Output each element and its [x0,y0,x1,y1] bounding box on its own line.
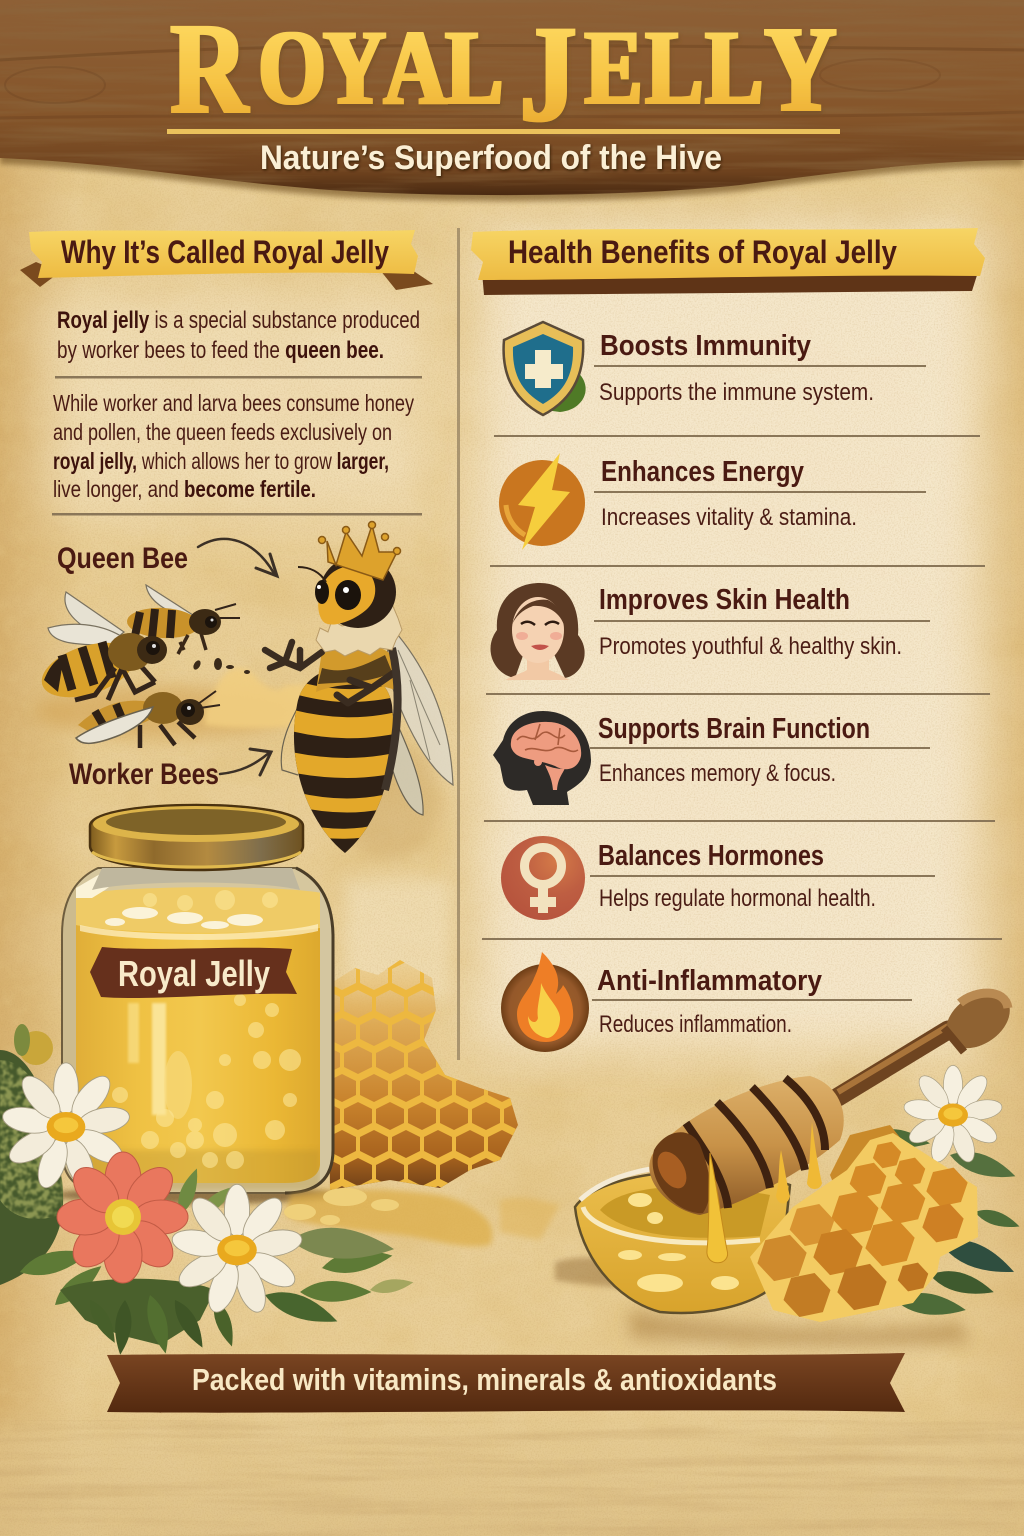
title: R [171,0,249,140]
honey dipper [649,980,1020,1263]
divider [490,565,985,567]
rule [52,513,422,516]
daisy right [170,1184,304,1316]
explanation text: royal jelly, which allows her to grow larger, [53,448,389,474]
ribbon: why it's called royal jelly [20,230,433,290]
queen head [298,556,396,628]
title rule [167,129,840,134]
benefit 4: supports brain function [493,711,930,805]
title: Y [764,3,836,137]
explanation text [53,390,414,502]
benefit 3: improves skin health: Improves Skin Health [599,584,850,616]
title: OYAL [258,9,527,126]
icon: flame [501,952,589,1052]
benefit 6: anti-inflammatory: Reduces inflammation. [599,1011,792,1038]
benefit 4: supports brain function: Enhances memory & focus. [599,760,836,787]
icon: brain head [493,711,591,805]
arrow from workers [220,749,271,775]
benefit 5: balances hormones: Balances Hormones [598,840,824,872]
queen thorax and arms [265,642,398,790]
explanation text: live longer, and become fertile. [53,476,316,502]
explanation text: and pollen, the queen feeds exclusively on [53,419,392,445]
label: queen bee: Queen Bee [57,542,188,575]
divider [486,693,990,695]
royal jelly blob and wash [35,658,440,860]
benefit 1: boosts immunity: Supports the immune system. [599,379,874,406]
benefit 2: enhances energy: Increases vitality & stamina. [601,504,857,531]
title: J [520,0,576,151]
queen fur collar [316,604,402,656]
divider [484,820,995,822]
divider [494,435,980,437]
honey spill ground [284,1188,970,1346]
worker bee left [35,592,167,708]
benefit 6: anti-inflammatory: Anti-Inflammatory [597,965,822,997]
explanation text: While worker and larva bees consume honey [53,390,414,416]
benefit 2: enhances energy: Enhances Energy [601,456,804,488]
benefit 3: improves skin health: Promotes youthful & healthy skin. [599,633,902,660]
benefit 6: anti-inflammatory [501,952,912,1052]
column divider [457,228,460,1060]
queen crown [318,522,400,580]
honeycomb behind jar [328,960,518,1190]
honeycomb right [750,1125,978,1322]
icon: woman [490,583,585,680]
intro text: by worker bees to feed the queen bee. [57,337,384,364]
rule [55,376,422,378]
bottom banner: Packed with vitamins, minerals & antioxidants [192,1362,777,1397]
right daisy [902,1065,1004,1165]
ribbon: health benefits [471,228,985,295]
divider [482,938,1002,940]
benefit 3: improves skin health [490,583,930,680]
foliage [0,1024,414,1356]
subtitle: Nature’s Superfood of the Hive [260,139,722,177]
icon: venus symbol [501,836,585,920]
benefit 1: boosts immunity: Boosts Immunity [600,330,811,362]
label: worker bees: Worker Bees [69,758,219,791]
queen wings [281,628,453,815]
bottom banner [107,1353,905,1413]
benefit 4: supports brain function: Supports Brain Function [598,713,870,745]
dipper knob [936,980,1020,1060]
wood header [0,0,1024,205]
jar lid [90,805,303,890]
icon: lightning bolt [499,453,585,550]
daisy left [1,1063,131,1192]
title: ELL [585,9,763,126]
intro text: Royal jelly is a special substance produced [57,307,420,334]
queen bee [265,522,453,853]
worker bee lower [76,691,220,748]
benefit 1: boosts immunity [504,322,926,415]
honey jar [55,805,335,1204]
right foliage behind comb [869,1126,1022,1320]
jar label [90,947,297,998]
benefit 5: balances hormones [501,836,935,920]
queen abdomen [294,674,393,853]
benefit 2: enhances energy [499,453,926,550]
ribbon: health benefits: Health Benefits of Royal Jelly [508,234,897,270]
left flowers and leaves [0,1024,414,1356]
icon: shield [504,322,586,415]
benefit 5: balances hormones: Helps regulate hormonal health. [599,885,876,912]
intro text [57,307,420,364]
worker bee upper [126,585,240,654]
arrow to queen [198,539,277,576]
honey bowl [575,1165,790,1313]
ribbon: why it's called royal jelly: Why It’s Called Royal Jelly [61,234,389,270]
jar label: Royal Jelly [118,953,270,994]
coral flower [57,1152,188,1283]
